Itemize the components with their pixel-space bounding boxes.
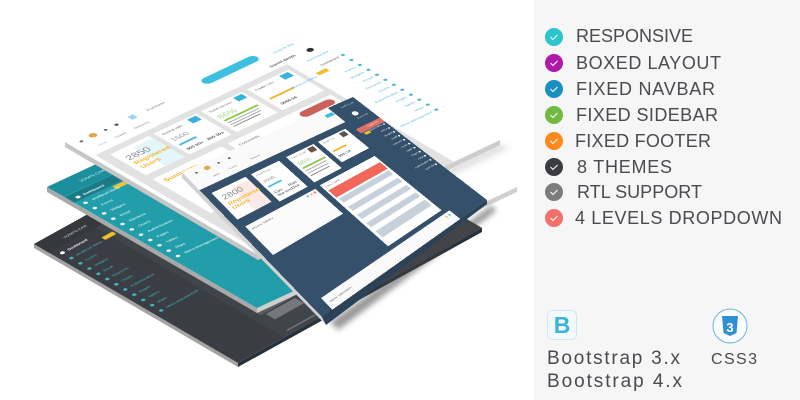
sheet: dark theme: Authentication bbox=[129, 272, 156, 288]
card: users: 3560.16 bbox=[279, 95, 299, 105]
card: summary: Summary bbox=[161, 163, 202, 183]
card: registered users: Users bbox=[230, 197, 252, 210]
card: registered users: Registered bbox=[132, 146, 173, 165]
header toolbar: Inbox bbox=[96, 141, 109, 147]
sheet: teal theme bbox=[47, 66, 517, 313]
navy sidebar menu: Icons bbox=[417, 155, 424, 160]
card: stats: Cpu bbox=[273, 187, 283, 194]
feature: fixed navbar: FIXED NAVBAR bbox=[576, 79, 715, 99]
navy footer bbox=[321, 210, 460, 310]
sheet: dark theme: Menu Management bbox=[164, 288, 201, 309]
navy sidebar menu: VOOPS.CAR bbox=[340, 102, 354, 109]
white sidebar menu: Multilevel Menu bbox=[290, 76, 319, 89]
card: users bbox=[247, 70, 324, 110]
sheet: teal theme: Pages bbox=[155, 230, 170, 238]
card: stats bbox=[251, 161, 308, 202]
icon: css3: 3 bbox=[726, 320, 734, 335]
card: registered users: 2800 bbox=[219, 185, 246, 201]
sheet: dark theme: Tables bbox=[146, 290, 161, 298]
sheet: dark theme bbox=[34, 109, 482, 367]
card: registered users bbox=[110, 135, 186, 175]
sheet: dark theme: Pages bbox=[137, 285, 152, 293]
text: bootstrap versions: Bootstrap 3.x bbox=[547, 348, 680, 369]
card: table: Latest Orders bbox=[325, 179, 340, 188]
sheet: teal theme: Maps bbox=[173, 242, 187, 249]
sheet: teal theme: Multilevel Menu bbox=[90, 186, 121, 201]
feature: fixed footer: FIXED FOOTER bbox=[575, 131, 711, 151]
card: stats bbox=[154, 113, 232, 155]
white sidebar menu: Maps bbox=[413, 106, 425, 112]
card: registered users bbox=[212, 177, 272, 220]
sheet: white theme bbox=[65, 27, 510, 263]
navy sidebar menu: Elements bbox=[392, 139, 403, 146]
white sidebar menu: Charts bbox=[377, 86, 391, 93]
white sidebar menu: Pages bbox=[395, 96, 408, 103]
white sidebar menu: Administrator bbox=[306, 50, 331, 62]
card: comments: Comments bbox=[237, 134, 261, 146]
feature: 8 themes: 8 THEMES bbox=[577, 157, 672, 177]
white sidebar menu: Email bbox=[362, 76, 374, 82]
white sidebar menu: Tables bbox=[403, 101, 417, 108]
sheet: teal theme: Elements bbox=[127, 212, 147, 222]
navy sidebar menu: Dashboard bbox=[367, 121, 379, 127]
navy sidebar menu: Email bbox=[391, 135, 398, 140]
navy sidebar menu: Charts bbox=[400, 143, 409, 148]
sheet: dark theme: Dashboard bbox=[66, 238, 89, 251]
navy sidebar menu: Widgets bbox=[383, 132, 393, 137]
card: progress bbox=[286, 144, 342, 182]
white sidebar menu: Elements bbox=[365, 81, 383, 90]
navy sidebar menu: Multilevel Menu bbox=[366, 124, 383, 133]
sheet: teal theme: Widgets bbox=[109, 202, 127, 211]
card: lists bbox=[318, 129, 369, 162]
card: stats: 50s load bbox=[276, 187, 294, 197]
sheet: teal theme: Tables bbox=[164, 236, 179, 243]
navy header: Inbox bbox=[212, 172, 220, 177]
white sidebar menu: Dashboard bbox=[319, 56, 340, 66]
navy sidebar menu: Authentication bbox=[414, 160, 430, 169]
feature: boxed layout: BOXED LAYOUT bbox=[576, 53, 721, 73]
icon: bootstrap: B bbox=[554, 312, 570, 338]
icon: css3 bbox=[713, 309, 747, 343]
navy header: Sessions bbox=[249, 154, 260, 160]
text: css3: CSS3 bbox=[711, 351, 757, 368]
white sidebar menu: Menu Management bbox=[399, 111, 434, 128]
card: chart bbox=[245, 189, 343, 255]
sheet: dark theme: Maps bbox=[155, 296, 168, 303]
white sidebar menu: Widgets bbox=[350, 71, 366, 79]
navy sheet shadow and edges bbox=[182, 172, 496, 330]
card: stats: 1500 bbox=[261, 175, 276, 184]
white sidebar menu: Authentication bbox=[374, 91, 400, 104]
sheet: teal theme: Authentication bbox=[146, 219, 174, 233]
feature: 4 levels dropdown: 4 LEVELS DROPDOWN bbox=[575, 208, 782, 228]
navy sidebar menu: Forms bbox=[380, 128, 388, 132]
navy footer: Server Information bbox=[329, 286, 352, 303]
header toolbar: Tickets bbox=[113, 132, 128, 139]
card: lists: 3560.16 bbox=[337, 150, 352, 158]
card: registered users: Users bbox=[139, 157, 164, 169]
card: registered users: 2850 bbox=[123, 146, 155, 162]
navy header: Tickets bbox=[228, 164, 238, 170]
navy header bbox=[182, 108, 345, 190]
card: table bbox=[320, 156, 442, 246]
card: summary bbox=[153, 146, 279, 213]
sheet: white theme: Search link bbox=[271, 42, 296, 54]
sheet: teal theme: Forms bbox=[99, 199, 114, 206]
card: progress: Ticket success bbox=[291, 151, 307, 159]
sheet: teal theme: Dashboard bbox=[81, 184, 106, 196]
card: progress: Ticket success bbox=[208, 101, 233, 113]
card: stats: General stats bbox=[256, 168, 272, 176]
icon: bootstrap bbox=[548, 310, 576, 340]
header toolbar: Purchase bbox=[145, 101, 167, 112]
text: bootstrap versions bbox=[547, 348, 682, 392]
card: stats: General stats bbox=[161, 124, 184, 136]
white sidebar menu bbox=[261, 41, 440, 139]
header toolbar bbox=[75, 44, 297, 152]
header toolbar: Sessions bbox=[133, 121, 151, 130]
sheet: dark theme: Charts bbox=[120, 274, 134, 282]
feature: fixed sidebar: FIXED SIDEBAR bbox=[576, 105, 718, 125]
sheet: dark theme: Widgets bbox=[93, 257, 110, 267]
header toolbar: Daniel Smith bbox=[268, 54, 297, 68]
card: progress bbox=[201, 92, 278, 132]
card: progress: 86% bbox=[215, 107, 240, 120]
sheet: dark theme: Forms bbox=[84, 253, 98, 261]
card: progress: 86% bbox=[296, 156, 313, 167]
navy sidebar menu: John Smith bbox=[356, 113, 369, 119]
card: registered users: Registered bbox=[226, 187, 262, 206]
card: lists: Create Lists bbox=[322, 137, 335, 144]
sheet: teal theme: Email bbox=[118, 210, 132, 217]
sheet: dark theme: Email bbox=[102, 264, 115, 272]
navy sidebar menu bbox=[328, 97, 487, 217]
navy sidebar menu: Tables bbox=[405, 147, 414, 152]
feature: rtl support: RTL SUPPORT bbox=[577, 182, 702, 202]
card: chart: Monthly Statistics bbox=[251, 217, 274, 230]
card: stats: 800 50s bbox=[206, 131, 226, 141]
feature: responsive: RESPONSIVE bbox=[576, 26, 693, 46]
navy sidebar menu: Pages bbox=[411, 151, 419, 156]
sheet: teal theme: VOOPS.CAR bbox=[78, 169, 106, 183]
sheet: dark theme: VOOPS.CAR bbox=[61, 224, 88, 239]
white sidebar menu: Forms bbox=[344, 66, 357, 73]
sheet: dark theme: Multilevel Menu bbox=[75, 240, 104, 256]
card: users: Create Lists bbox=[254, 81, 275, 91]
card: stats: 900 50s bbox=[185, 140, 205, 150]
text: bootstrap versions: Bootstrap 4.x bbox=[547, 371, 682, 392]
sheet: navy theme bbox=[182, 97, 487, 317]
card: stats: Disk bbox=[290, 183, 301, 190]
card: stats: 1500 bbox=[168, 131, 191, 142]
card: stats: Ram bbox=[287, 180, 298, 187]
sheet: teal theme: Menu Management bbox=[183, 236, 221, 254]
sheet: dark theme: Elements bbox=[111, 266, 130, 277]
navy sidebar menu: Calendar bbox=[424, 164, 435, 171]
sheet: teal theme: Charts bbox=[136, 220, 152, 227]
card: comments bbox=[227, 95, 388, 178]
